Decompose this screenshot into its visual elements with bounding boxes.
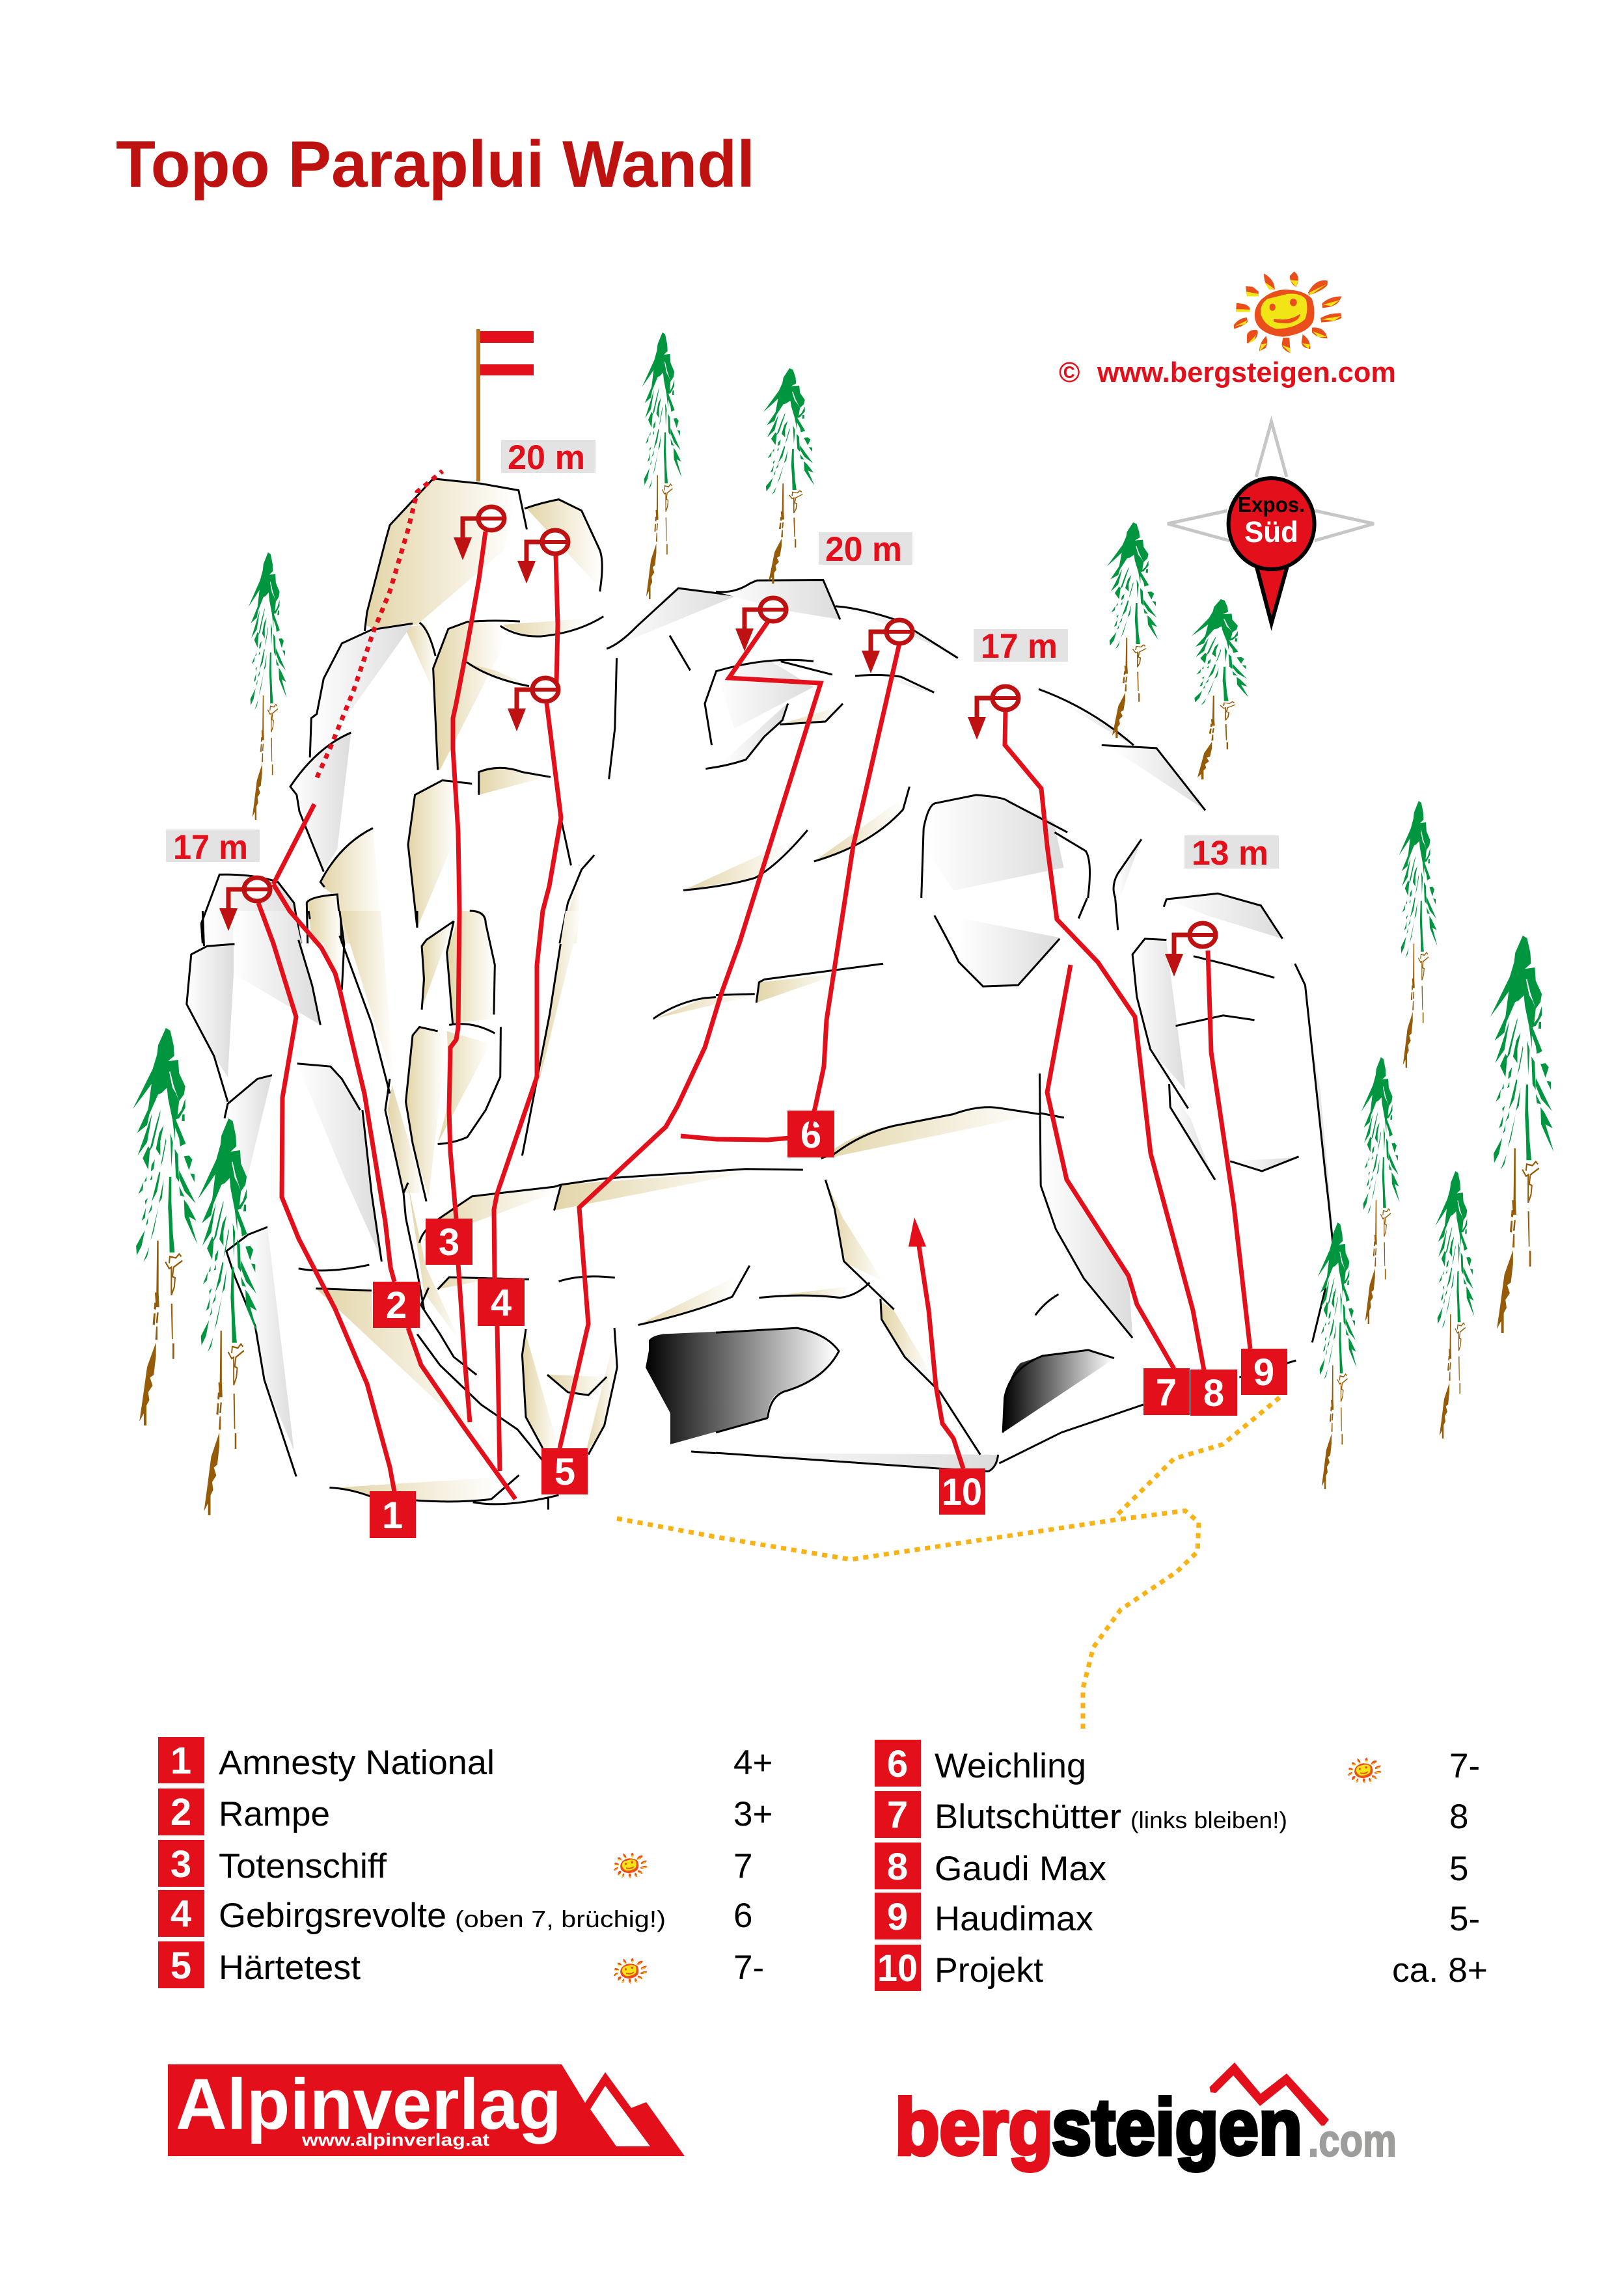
overhang cave, dark [646,1328,836,1444]
tree 7 [198,1118,258,1515]
route number box 7: 7 [1156,1371,1177,1414]
legend row 2: Rampe [219,1795,330,1833]
legend row 10: Projekt [935,1951,1043,1990]
tree 4 [1107,522,1158,738]
legend row 8: Gaudi Max [935,1850,1106,1888]
legend row 5: Härtetest [219,1949,361,1987]
legend row 2: 3+ [733,1795,773,1833]
route 8 [1005,711,1204,1370]
legend row 8: 5 [1449,1850,1468,1888]
legend row 1: 4+ [733,1744,773,1782]
legend row 7: (links bleiben!) [1130,1807,1287,1833]
legend row 9: 9 [887,1896,908,1938]
overhang cave, right [1003,1350,1114,1433]
legend row 7 [875,1791,1468,1838]
legend row 7: 8 [1449,1798,1468,1836]
anchor 7 [968,686,1019,740]
route number box 7 [1143,1368,1190,1415]
route 6 [810,643,899,1127]
logo: Alpinverlag: www.alpinverlag.at [301,2130,489,2150]
legend row 3: Totenschiff [219,1847,387,1885]
legend row 8 [875,1843,1468,1889]
legend row 6: 7- [1449,1747,1480,1785]
route number box 1 [370,1491,416,1538]
route 9 [1208,951,1250,1349]
route number box 1: 1 [382,1494,403,1537]
dotted descent line [317,471,443,777]
rock face: upper right section [716,580,1205,898]
tree 10 [1361,1057,1400,1324]
route 4 [494,703,561,1278]
copyright website: © [1059,357,1080,388]
legend row 4 [158,1890,752,1937]
route 10 with arrow [909,1217,963,1468]
route 4 lower part [497,1326,500,1471]
anchor 3 [508,678,558,731]
legend row 4: (oben 7, brüchig!) [455,1906,666,1932]
legend row 4: 6 [733,1897,752,1935]
rock face: lower right section [716,893,1334,1472]
tree 12 [1318,1222,1357,1489]
route number box 4: 4 [491,1282,512,1324]
anchor 1 [454,507,504,560]
exposure compass: Süd [1244,515,1298,548]
logo: bergsteigen.com: steigen [1052,2083,1302,2171]
route 6 variant [681,1136,797,1140]
route 7 [1047,965,1174,1369]
legend row 8: 8 [887,1846,908,1888]
legend row 2 [158,1789,773,1835]
tree 5 [1192,599,1248,779]
legend row 6: 6 [887,1743,908,1785]
route number box 2: 2 [386,1284,407,1327]
logo: Alpinverlag: Alpinverlag [176,2064,562,2144]
legend row 6: Weichling [935,1747,1086,1785]
legend row 4: 4 [171,1893,191,1935]
height label 20 m centre: 20 m [825,530,902,569]
height label 20 m left: 20 m [508,439,585,477]
route 3 lower part [458,1263,470,1422]
route number box 6: 6 [800,1114,821,1156]
anchor 4 [219,878,270,931]
legend row 1: Amnesty National [219,1744,495,1782]
legend row 5: 7- [733,1949,764,1987]
legend row 2: 2 [171,1791,191,1833]
tree 2 [642,332,682,599]
legend row 3 [158,1840,752,1887]
title: Topo Paraplui Wandl [116,128,755,201]
legend row 10 [875,1945,1488,1991]
exit line to dotted descent [273,804,314,884]
route 3 [449,532,486,1219]
route 2 [273,884,394,1282]
tree 6 [133,1028,197,1425]
logo: bergsteigen.com [895,2062,1397,2171]
route number box 6 [787,1111,834,1157]
legend row 7: Blutschütter [935,1798,1121,1836]
height label 13 m: 13 m [1192,834,1268,872]
anchor 5 [735,598,786,651]
summit flag [476,329,534,481]
legend row 5: 5 [171,1945,191,1987]
route 5 [560,621,821,1448]
logo: Alpinverlag [168,2064,685,2156]
route number box 8: 8 [1203,1372,1224,1414]
tree 11 [1436,1171,1475,1438]
route number box 5: 5 [554,1451,575,1493]
route number box 4 [478,1278,525,1326]
route number box 8 [1190,1370,1237,1416]
legend row 9: 5- [1449,1900,1480,1938]
rock face: upper left section [201,478,814,943]
tree 8 [1399,801,1438,1068]
rock face: lower left section [187,911,803,1509]
legend row 3: 7 [733,1847,752,1885]
route 2 lower part [408,1328,515,1499]
legend row 1: 1 [171,1740,191,1782]
route number box 2 [373,1282,420,1328]
legend row 6 [875,1740,1480,1787]
legend row 7: 7 [887,1794,908,1836]
route number box 3 [426,1219,472,1265]
tree 1 [249,552,287,820]
route 4 upper extension [556,554,558,683]
legend: left column [158,1737,773,1988]
logo: bergsteigen.com: berg [895,2083,1053,2171]
legend row 10: 10 [877,1947,918,1990]
exposure compass [1168,422,1374,623]
anchor 6 [862,620,912,673]
height label 17 m left: 17 m [173,828,248,867]
legend row 4: Gebirgsrevolte [219,1897,446,1935]
anchor 2 [517,530,568,584]
approach trail [617,1395,1283,1729]
exposure compass: Expos. [1238,493,1305,517]
legend row 10: ca. 8+ [1392,1951,1488,1990]
copyright website: www.bergsteigen.com [1097,357,1396,388]
logo: bergsteigen.com: .com [1308,2115,1397,2166]
legend row 1 [158,1737,773,1783]
route number box 3: 3 [439,1221,459,1263]
icon: sun logo [1234,271,1342,353]
legend: right column [875,1740,1488,1991]
route number box 9 [1241,1349,1287,1395]
route 1 [258,903,394,1492]
anchor 8 [1165,923,1216,977]
route number box 5 [541,1448,588,1494]
legend row 3: 3 [171,1843,191,1885]
tree 9 [1490,936,1553,1333]
route number box 9: 9 [1253,1351,1274,1394]
route number box 10: 10 [942,1471,982,1513]
legend row 9: Haudimax [935,1900,1093,1938]
legend row 9 [875,1893,1480,1939]
height label 17 m centre: 17 m [981,627,1058,666]
legend row 5 [158,1941,764,1988]
tree 3 [763,368,814,584]
